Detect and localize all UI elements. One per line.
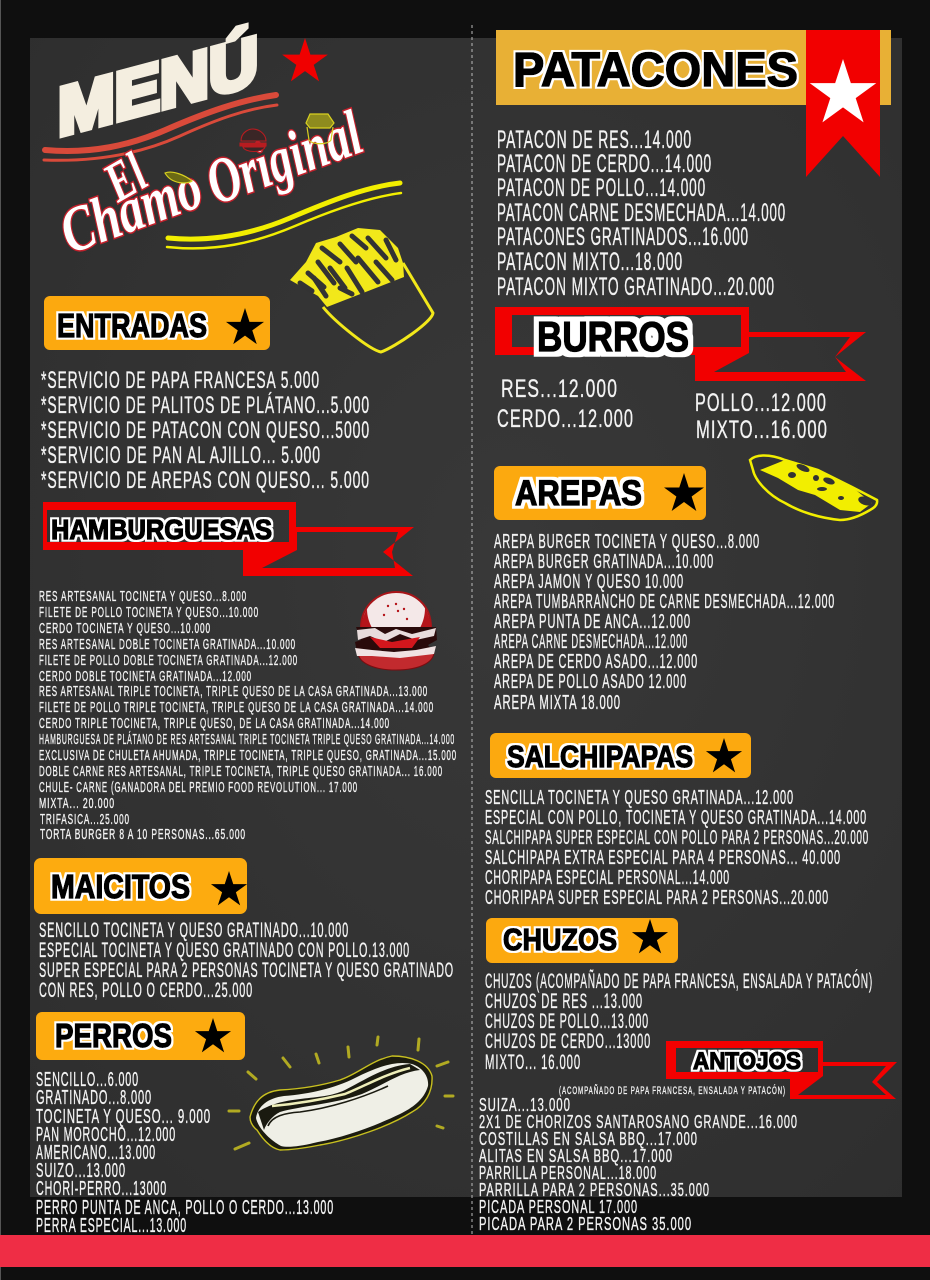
heading: BURROS [537,313,689,360]
icon: black star [706,738,742,772]
arepas list: AREPA CARNE DESMECHADA...12.000 [494,631,688,653]
icon: small arepa [165,172,192,183]
section: maicitos [34,858,454,1002]
entradas list: *SERVICIO DE PAN AL AJILLO... 5.000 [41,442,321,469]
perros list: GRATINADO...8.000 [36,1087,152,1109]
hamburguesas list: TORTA BURGER 8 A 10 PERSONAS...65.000 [40,826,246,843]
section: arepas [494,456,877,714]
burros list [497,375,828,444]
perros list: PAN MOROCHO...12.000 [36,1124,176,1146]
antojos list: PICADA PERSONAL 17.000 [479,1196,638,1217]
burros list: POLLO...12.000 [695,389,827,417]
hamburguesas list: RES ARTESANAL TRIPLE TOCINETA, TRIPLE QUESO DE LA CASA GRATINADA...13.000 [39,683,428,700]
hamburguesas list: FILETE DE POLLO TOCINETA Y QUESO...10.000 [39,604,259,621]
hamburguesas list: CERDO TRIPLE TOCINETA, TRIPLE QUESO, DE LA CASA GRATINADA...14.000 [39,715,390,732]
chuzos list: CHUZOS DE RES ...13.000 [485,990,643,1013]
burros list: CERDO...12.000 [497,405,634,433]
heading badge [36,1012,245,1060]
heading: PATACONES [513,44,798,97]
maicitos list: SUPER ESPECIAL PARA 2 PERSONAS TOCINETA Y QUESO GRATINADO [39,959,454,982]
yellow swoosh [167,183,401,248]
section: entradas [41,296,370,494]
salchipapas list [485,787,869,909]
heading: ENTRADAS [57,307,207,344]
icon: black star [226,308,264,344]
antojos list: PARRILLA PARA 2 PERSONAS...35.000 [479,1179,710,1200]
red swoosh [44,95,277,160]
icon: hamburger [355,592,437,670]
perros list: CHORI-PERRO...13000 [36,1178,167,1200]
maicitos list: SENCILLO TOCINETA Y QUESO GRATINADO...10.000 [39,919,349,942]
maicitos list: ESPECIAL TOCINETA Y QUESO GRATINADO CON POLLO.13.000 [39,939,410,962]
heading badge [44,296,270,350]
icon: arepa [750,456,877,520]
icon: hot dog [229,1037,453,1150]
heading badge [490,733,751,778]
chuzos list: CHUZOS DE POLLO...13.000 [485,1010,649,1033]
arepas list: AREPA MIXTA 18.000 [494,692,621,714]
patacones list [497,126,786,301]
antojos list: PICADA PARA 2 PERSONAS 35.000 [479,1213,692,1234]
ribbon [495,307,866,381]
logo [44,21,401,267]
arepas list: AREPA JAMON Y QUESO 10.000 [494,571,684,593]
entradas list: *SERVICIO DE PAPA FRANCESA 5.000 [41,367,320,394]
patacones list: PATACON DE RES...14.000 [497,126,692,154]
perros list: PERRA ESPECIAL...13.000 [36,1215,187,1237]
brand name: El Chamo Original [51,97,371,267]
icon: black star [664,473,704,511]
section: burros [495,307,866,444]
antojos list [479,1094,798,1234]
ribbon [666,1041,897,1099]
menu page: HAMBURGUESA DE PLÁTANO DE RES ARTESANAL TRIPLE TOCINETA TRIPLE QUESO GRATINADA...14.000 [39,731,455,748]
arepas list [494,531,835,714]
brand name: El Chamo Original: Original [197,97,371,218]
hamburguesas list: RES ARTESANAL DOBLE TOCINETA GRATINADA...10.000 [39,636,296,653]
section: hamburguesas [39,502,457,843]
arepas list: AREPA DE POLLO ASADO 12.000 [494,671,687,693]
hamburguesas list: CHULE- CARNE (GANADORA DEL PREMIO FOOD REVOLUTION... 17.000 [39,779,358,796]
hamburguesas list: RES ARTESANAL TOCINETA Y QUESO...8.000 [39,588,247,605]
icon: red star [282,38,328,81]
section: perros [36,1012,453,1237]
icon: small burger [240,129,266,152]
chuzos list [485,969,873,1074]
chuzos list: CHUZOS DE CERDO...13000 [485,1030,651,1053]
hamburguesas list: CERDO DOBLE TOCINETA GRATINADA...12.000 [39,668,252,685]
ribbon [43,502,414,576]
title: Menú: MENÚ [58,21,258,151]
heading badge [494,466,706,520]
heading: ANTOJOS [693,1048,801,1075]
maicitos list: CON RES, POLLO O CERDO...25.000 [39,979,253,1002]
hamburguesas list: DOBLE CARNE RES ARTESANAL, TRIPLE TOCINETA, TRIPLE QUESO GRATINADA... 16.000 [39,763,443,780]
perros list: SENCILLO...6.000 [36,1069,139,1091]
antojos list: ALITAS EN SALSA BBQ...17.000 [479,1145,673,1166]
heading: MAICITOS [51,868,190,905]
burros list: MIXTO...16.000 [696,416,828,444]
red bookmark ribbon [806,30,880,177]
chuzos list: MIXTO... 16.000 [485,1051,581,1074]
patacones list: PATACON DE POLLO...14.000 [497,174,706,202]
antojos list: SUIZA...13.000 [479,1094,571,1115]
section: salchipapas [485,733,869,909]
entradas list: *SERVICIO DE PATACON CON QUESO...5000 [41,417,370,444]
heading: CHUZOS [503,922,617,957]
icon: black star [195,1018,231,1052]
icon: black star [211,871,247,905]
hamburguesas list: MIXTA... 20.000 [39,795,115,812]
entradas list [41,367,370,494]
brand name: El Chamo Original: Chamo [51,151,211,267]
perros list: PERRO PUNTA DE ANCA, POLLO O CERDO...13.000 [36,1197,334,1219]
icon: white star [810,59,876,122]
icon: small fries [306,114,334,144]
arepas list: AREPA PUNTA DE ANCA...12.000 [494,611,691,633]
arepas list: AREPA BURGER GRATINADA...10.000 [494,551,714,573]
antojos list: PARRILLA PERSONAL...18.000 [479,1162,657,1183]
maicitos list [39,919,454,1002]
heading badge [486,918,678,963]
hamburguesas list: EXCLUSIVA DE CHULETA AHUMADA, TRIPLE TOCINETA, TRIPLE QUESO, GRATINADA...15.000 [39,747,457,764]
patacones list: PATACON DE CERDO...14.000 [497,150,712,178]
entradas list: *SERVICIO DE PALITOS DE PLÁTANO...5.000 [41,392,370,419]
section: patacones [496,30,891,301]
heading: AREPAS [515,474,642,513]
heading banner [496,30,891,105]
arepas list: AREPA DE CERDO ASADO...12.000 [494,651,698,673]
icon: black star [632,919,668,953]
perros list: SUIZO...13.000 [36,1160,126,1182]
icon: french fries [290,228,433,352]
burros list: RES...12.000 [501,375,618,403]
section: chuzos [485,918,873,1074]
heading: PERROS [55,1017,172,1054]
perros list: AMERICANO...13.000 [36,1142,156,1164]
brand name: El Chamo Original: El [93,141,158,215]
hamburguesas list: FILETE DE POLLO DOBLE TOCINETA GRATINADA...12.000 [39,652,298,669]
hamburguesas list: FILETE DE POLLO TRIPLE TOCINETA, TRIPLE QUESO DE LA CASA GRATINADA...14.000 [39,699,434,716]
hamburguesas list: TRIFASICA...25.000 [40,811,130,828]
patacones list: PATACON MIXTO...18.000 [497,248,683,276]
heading: HAMBURGUESAS [51,514,272,545]
hamburguesas list [39,588,457,843]
bottom red bar [0,1235,930,1267]
section: antojos [479,1041,897,1234]
perros list: TOCINETA Y QUESO... 9.000 [36,1106,211,1128]
heading: SALCHIPAPAS [507,739,693,774]
heading badge [34,858,247,914]
perros list [36,1069,334,1237]
antojos list: COSTILLAS EN SALSA BBQ...17.000 [479,1128,698,1149]
hamburguesas list: CERDO TOCINETA Y QUESO...10.000 [39,620,211,637]
entradas list: *SERVICIO DE AREPAS CON QUESO... 5.000 [41,467,370,494]
